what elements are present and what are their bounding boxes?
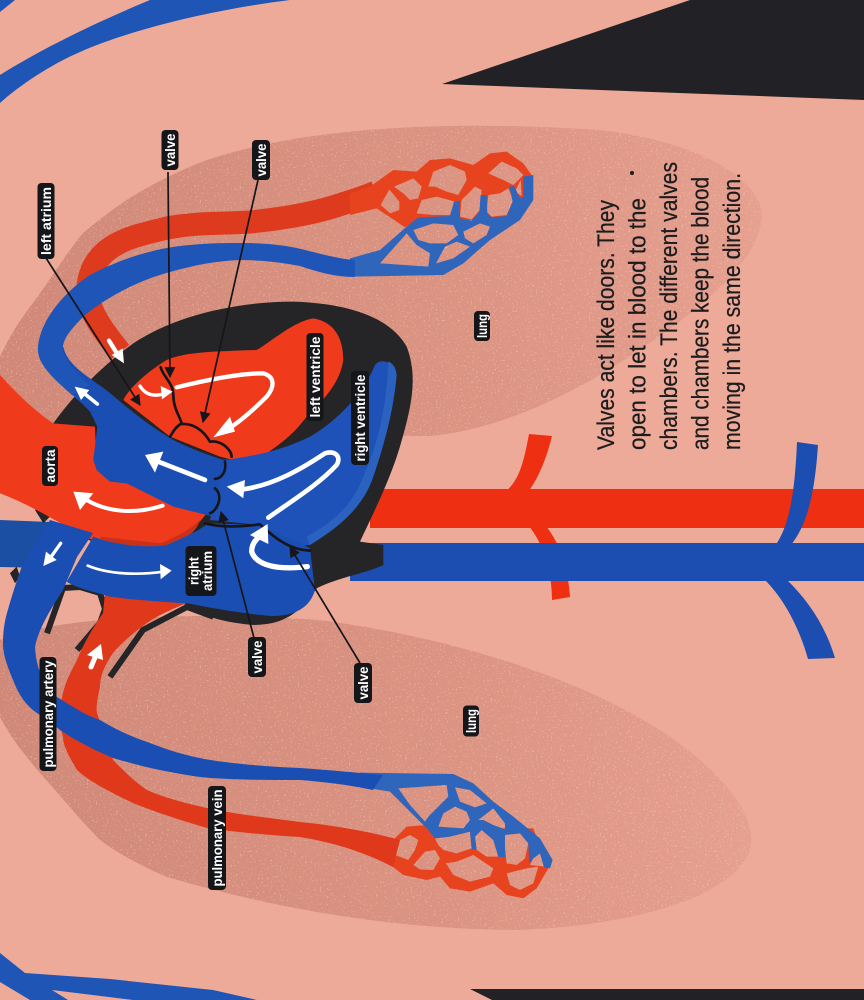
pointer: mitral valve bbox=[168, 172, 170, 377]
superior vena cava bbox=[0, 520, 50, 568]
upper lung bbox=[0, 126, 762, 436]
label: valve upper: valve bbox=[162, 133, 178, 166]
black shape bottom right bbox=[470, 989, 864, 1000]
label: right atrium bbox=[186, 546, 216, 596]
black shape top right bbox=[442, 0, 864, 100]
label: aorta: aorta bbox=[42, 449, 58, 482]
lower pulmonary artery bbox=[3, 520, 383, 790]
arrow: lower pulmonary artery bbox=[50, 543, 61, 558]
text block: valves explanation: chambers. The different valves bbox=[656, 162, 683, 450]
valve lines bbox=[161, 367, 310, 551]
pointer: aortic valve bbox=[203, 180, 258, 422]
arrow: upper pulmonary artery bbox=[83, 393, 97, 404]
pointer: left atrium bbox=[46, 258, 140, 405]
lower pulmonary vein bbox=[60, 593, 400, 867]
arrow: upper pulmonary vein bbox=[109, 341, 117, 354]
arrow: left atrium flow bbox=[140, 386, 167, 395]
descending aorta with branches bbox=[370, 434, 864, 600]
text block: valves explanation bbox=[593, 162, 746, 450]
label: right atrium: right bbox=[186, 557, 202, 585]
heart bbox=[0, 243, 413, 867]
left ventricle and atrium bbox=[123, 318, 343, 460]
aorta bbox=[0, 375, 207, 548]
label: left ventricle: left ventricle bbox=[307, 336, 323, 418]
arrow: pulmonary trunk flow bbox=[158, 462, 205, 480]
arrow: right ventricle flow bbox=[243, 452, 338, 518]
lower lung capillaries bbox=[360, 773, 553, 898]
arrow: lower pulmonary vein bbox=[87, 644, 103, 667]
label: right atrium: atrium bbox=[199, 551, 215, 591]
label: valve lower right: valve bbox=[355, 666, 371, 700]
upper lung capillaries bbox=[350, 152, 533, 277]
label: lung upper: lung bbox=[474, 314, 490, 338]
pointer: tricuspid valve bbox=[290, 547, 360, 663]
arrow: left ventricle flow bbox=[177, 373, 273, 430]
text block: valves explanation: Valves act like doors. They bbox=[593, 200, 620, 450]
pointer lines bbox=[46, 172, 360, 663]
label: pulmonary artery: pulmonary artery bbox=[40, 660, 56, 768]
arrow: aorta flow bbox=[87, 500, 163, 511]
upper pulmonary vein bbox=[88, 192, 376, 352]
pulmonary trunk bbox=[38, 347, 223, 517]
lower lung bbox=[0, 616, 751, 930]
right atrium bbox=[67, 523, 315, 616]
vena cava with branches bbox=[350, 442, 864, 659]
right ventricle bbox=[210, 361, 397, 547]
white flow arrows bbox=[43, 341, 338, 579]
text block: valves explanation: and chambers keep the blood bbox=[688, 177, 714, 450]
blood vessel top left bbox=[0, 0, 290, 103]
label: valve upper right: valve bbox=[253, 143, 269, 176]
label: right ventricle: right ventricle bbox=[352, 374, 368, 462]
label: left atrium: left atrium bbox=[38, 187, 54, 255]
heart muscle outline bbox=[10, 302, 413, 677]
arrow: vena cava into right atrium bbox=[88, 566, 163, 574]
label: valve lower: valve bbox=[249, 640, 265, 674]
arrow: right atrium to ventricle bbox=[252, 535, 307, 568]
blood vessel bottom left bbox=[0, 953, 257, 1000]
label: pulmonary vein: pulmonary vein bbox=[209, 790, 225, 886]
pointer: pulmonary valve bbox=[221, 512, 254, 638]
text block: valves explanation: moving in the same direction. bbox=[719, 173, 746, 450]
text block: valves explanation: open to let in blood to the bbox=[624, 198, 652, 450]
upper pulmonary artery bbox=[38, 243, 355, 395]
label: lung lower: lung bbox=[463, 709, 479, 733]
